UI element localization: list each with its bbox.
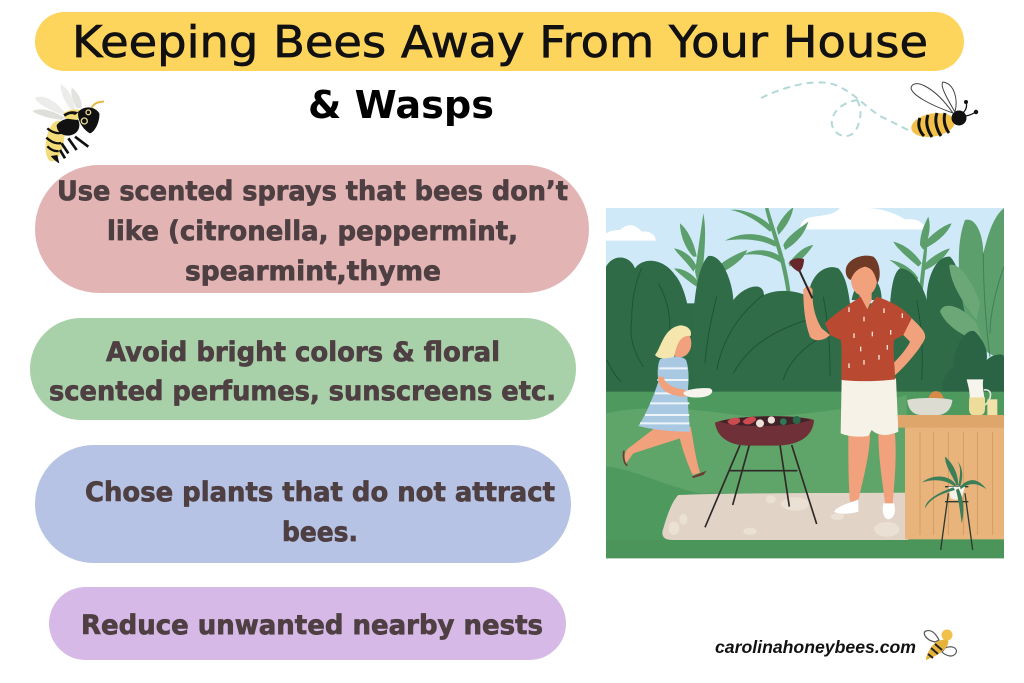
plant on stand: [922, 457, 987, 550]
panel: avoid bright colors: [30, 318, 576, 420]
panel: avoid bright colors: scented perfumes, sunscreens etc.: [49, 376, 556, 407]
panel: plants: Chose plants that do not attract: [85, 477, 555, 508]
panel: plants: [35, 445, 571, 563]
lawn: [606, 392, 1004, 558]
website credit: carolinahoneybees.com: [715, 637, 916, 657]
title banner: Keeping Bees Away From Your House: [72, 17, 928, 68]
panel: nests: Reduce unwanted nearby nests: [81, 610, 543, 641]
icon: wasp left: [33, 84, 104, 163]
neck and face: [859, 292, 872, 310]
panel: nests: [49, 587, 566, 660]
panel: avoid bright colors: Avoid bright colors & floral: [106, 337, 500, 368]
shirt: [825, 297, 912, 381]
ferns: [674, 207, 952, 300]
panel: scented sprays: [35, 165, 589, 293]
dark bushes: [606, 303, 942, 392]
man: [789, 256, 925, 519]
illustration: backyard barbecue: [606, 207, 1004, 558]
flight path: [761, 82, 908, 136]
counter: [905, 427, 1004, 539]
panel: scented sprays: spearmint,thyme: [185, 256, 441, 287]
light leaves right: [959, 208, 1004, 360]
icon: bee right: [909, 82, 978, 140]
panel: scented sprays: like (citronella, peppermint,: [107, 216, 518, 247]
girl: [623, 325, 712, 478]
patio: [662, 493, 908, 540]
subtitle: & Wasps: [308, 83, 494, 127]
grill: [705, 445, 817, 527]
arms: [803, 286, 830, 340]
bowl and jug: [928, 391, 944, 399]
panel: scented sprays: Use scented sprays that bees don’t: [57, 176, 568, 207]
icon: small bee logo: [924, 630, 956, 660]
panel: plants: bees.: [282, 517, 358, 548]
